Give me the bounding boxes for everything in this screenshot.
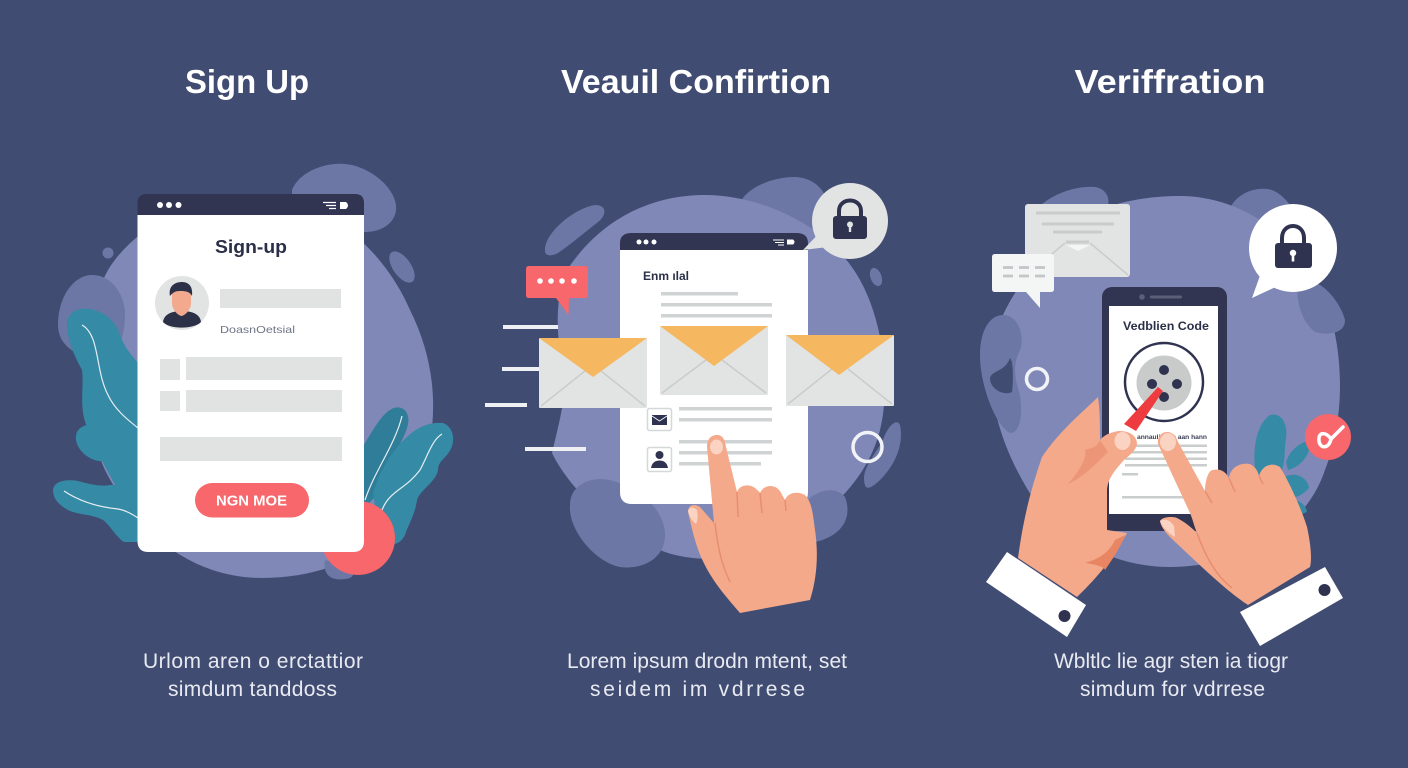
button: NGN MOE xyxy=(216,492,287,510)
caption: sign up: Urlom aren o erctattior xyxy=(143,650,363,673)
background blobs xyxy=(980,187,1345,567)
right hand xyxy=(1158,432,1311,605)
window header bar xyxy=(620,233,808,250)
shirt cuff left xyxy=(986,552,1086,637)
red stylus xyxy=(1124,387,1163,431)
panel: verification illustration xyxy=(980,187,1351,646)
screen text: annaulisnan aan hann xyxy=(1137,434,1207,441)
caption: sign up xyxy=(143,650,363,701)
envelope centre xyxy=(660,326,768,395)
window header bar xyxy=(138,194,364,215)
speech bubble: alert xyxy=(526,266,588,315)
title: Email Confirmation: Veauil Confirtion xyxy=(561,63,831,100)
card heading: Sign-up xyxy=(215,237,287,257)
speed lines xyxy=(485,325,586,451)
title: Sign Up: Sign Up xyxy=(185,63,309,100)
screen heading: Vedblien Code xyxy=(1123,321,1209,333)
text lines xyxy=(661,292,772,466)
plant xyxy=(1254,415,1311,514)
avatar xyxy=(155,276,209,330)
plant: right leaves xyxy=(362,407,453,545)
hand pointing xyxy=(688,435,817,613)
caption: verification xyxy=(1054,650,1288,701)
signup window card xyxy=(138,194,364,552)
icon: contact thumbnail xyxy=(648,448,672,472)
card heading: Enm ılal xyxy=(643,269,689,283)
button xyxy=(195,483,309,518)
envelope left xyxy=(539,338,647,408)
caption: email confirmation xyxy=(567,650,847,701)
caption: verification: simdum for vdrrese xyxy=(1080,678,1265,701)
speech bubble: message xyxy=(992,254,1054,308)
screen lines xyxy=(1122,444,1207,498)
speech bubble: lock xyxy=(1249,204,1337,298)
speech bubble: lock xyxy=(803,183,888,259)
caption: email confirmation: Lorem ipsum drodn mtent, set xyxy=(567,650,847,673)
caption: email confirmation: seidem im vdrrese xyxy=(590,678,805,701)
envelope right xyxy=(786,335,894,406)
field caption: DoasnOetsial xyxy=(220,324,295,336)
caption: verification: Wbltlc lie agr sten ia tiogr xyxy=(1054,650,1288,673)
background blobs xyxy=(545,177,901,568)
plant: left leaves xyxy=(53,309,140,542)
email window card xyxy=(620,233,808,504)
left hand xyxy=(1018,397,1137,597)
panel: sign up illustration xyxy=(53,164,453,579)
background blobs xyxy=(58,164,433,579)
ring xyxy=(853,432,882,462)
shirt cuff right xyxy=(1240,567,1343,646)
form fields xyxy=(160,289,342,461)
envelope xyxy=(1025,204,1130,277)
caption: sign up: simdum tanddoss xyxy=(168,678,337,701)
icon: mail thumbnail xyxy=(648,408,672,430)
red circle xyxy=(321,501,395,575)
check badge xyxy=(1305,414,1351,460)
panel: email confirmation illustration xyxy=(485,177,901,613)
phone xyxy=(1102,287,1227,531)
ring xyxy=(1026,368,1048,390)
title: Verification: Veriffration xyxy=(1074,63,1266,100)
code dial xyxy=(1125,343,1203,421)
